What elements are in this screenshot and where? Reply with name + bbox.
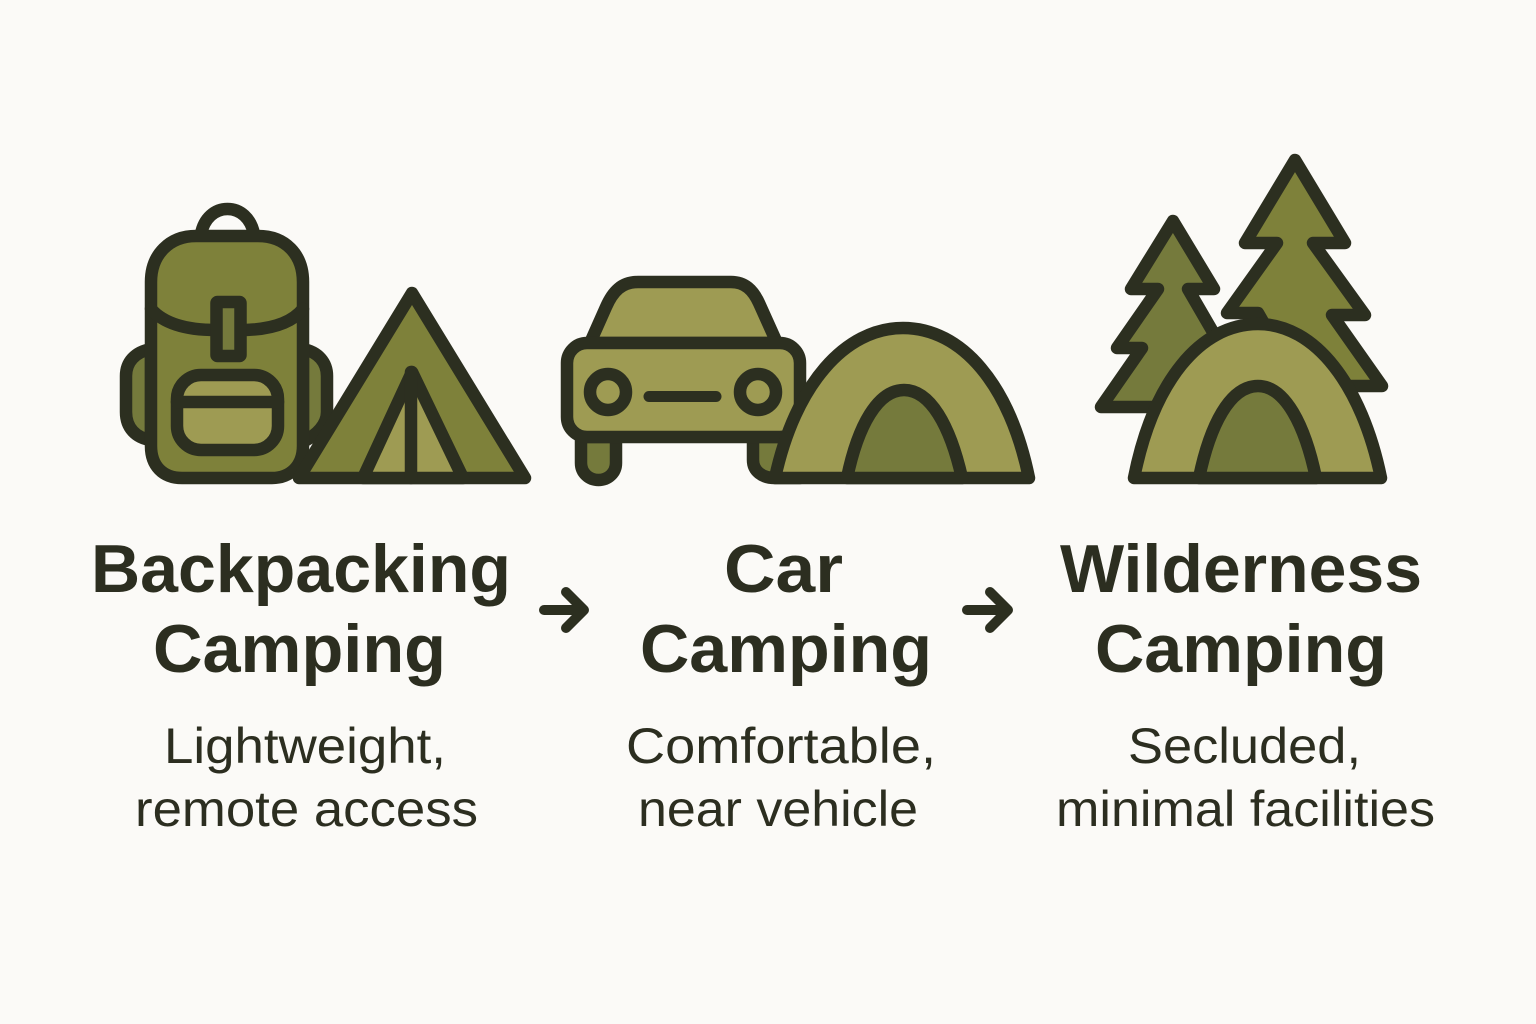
dome tent body (775, 328, 1029, 478)
car left wheel (581, 437, 616, 480)
description: Car (626, 718, 936, 837)
tent door (363, 372, 463, 478)
heading: Backpacking Camping: Backpacking (91, 531, 511, 607)
heading: Wilderness Camping: Wilderness (1060, 531, 1422, 607)
dome tent door (847, 390, 962, 478)
icon: car and dome tent (567, 282, 1029, 480)
heading: Wilderness Camping: Camping (1095, 611, 1387, 687)
description: Backpacking (135, 718, 478, 837)
tent body (299, 293, 525, 478)
heading: Backpacking Camping: Camping (153, 611, 446, 687)
description: Wilderness: minimal facilities (1056, 781, 1435, 837)
description: Car: Comfortable, (626, 718, 936, 774)
backpack strap (216, 302, 240, 356)
small tree (1101, 221, 1235, 407)
tent door seam (405, 372, 417, 478)
backpack right side pocket (303, 349, 327, 442)
backpack pocket divider (177, 396, 278, 408)
heading: Car Camping (640, 531, 932, 687)
description: Backpacking: Lightweight, (164, 718, 446, 774)
heading: Wilderness Camping (1060, 531, 1422, 687)
description: Wilderness: Secluded, (1128, 718, 1361, 774)
dome tent body (1134, 324, 1381, 478)
large tree (1227, 160, 1382, 386)
description: Backpacking: remote access (135, 781, 478, 837)
heading: Backpacking Camping (91, 531, 511, 687)
icon: backpack and tent (126, 209, 525, 478)
car body (567, 343, 800, 437)
description: Car: near vehicle (638, 781, 918, 837)
heading: Car Camping: Car (724, 531, 843, 607)
heading: Car Camping: Camping (640, 611, 932, 687)
car left headlight (590, 374, 626, 410)
description: Wilderness (1056, 718, 1435, 837)
backpack flap (151, 309, 303, 330)
car roof (590, 282, 777, 343)
car right headlight (740, 374, 776, 410)
car grille (649, 391, 716, 402)
backpack body (151, 236, 303, 478)
backpack front pocket (177, 375, 278, 450)
backpack left side pocket (126, 349, 151, 440)
icon: trees and dome tent (1101, 160, 1382, 478)
arrow: backpacking to car (544, 592, 584, 628)
dome tent door (1199, 386, 1316, 478)
arrow: car to wilderness (967, 592, 1008, 628)
backpack handle (201, 209, 254, 234)
car right wheel (753, 437, 800, 478)
